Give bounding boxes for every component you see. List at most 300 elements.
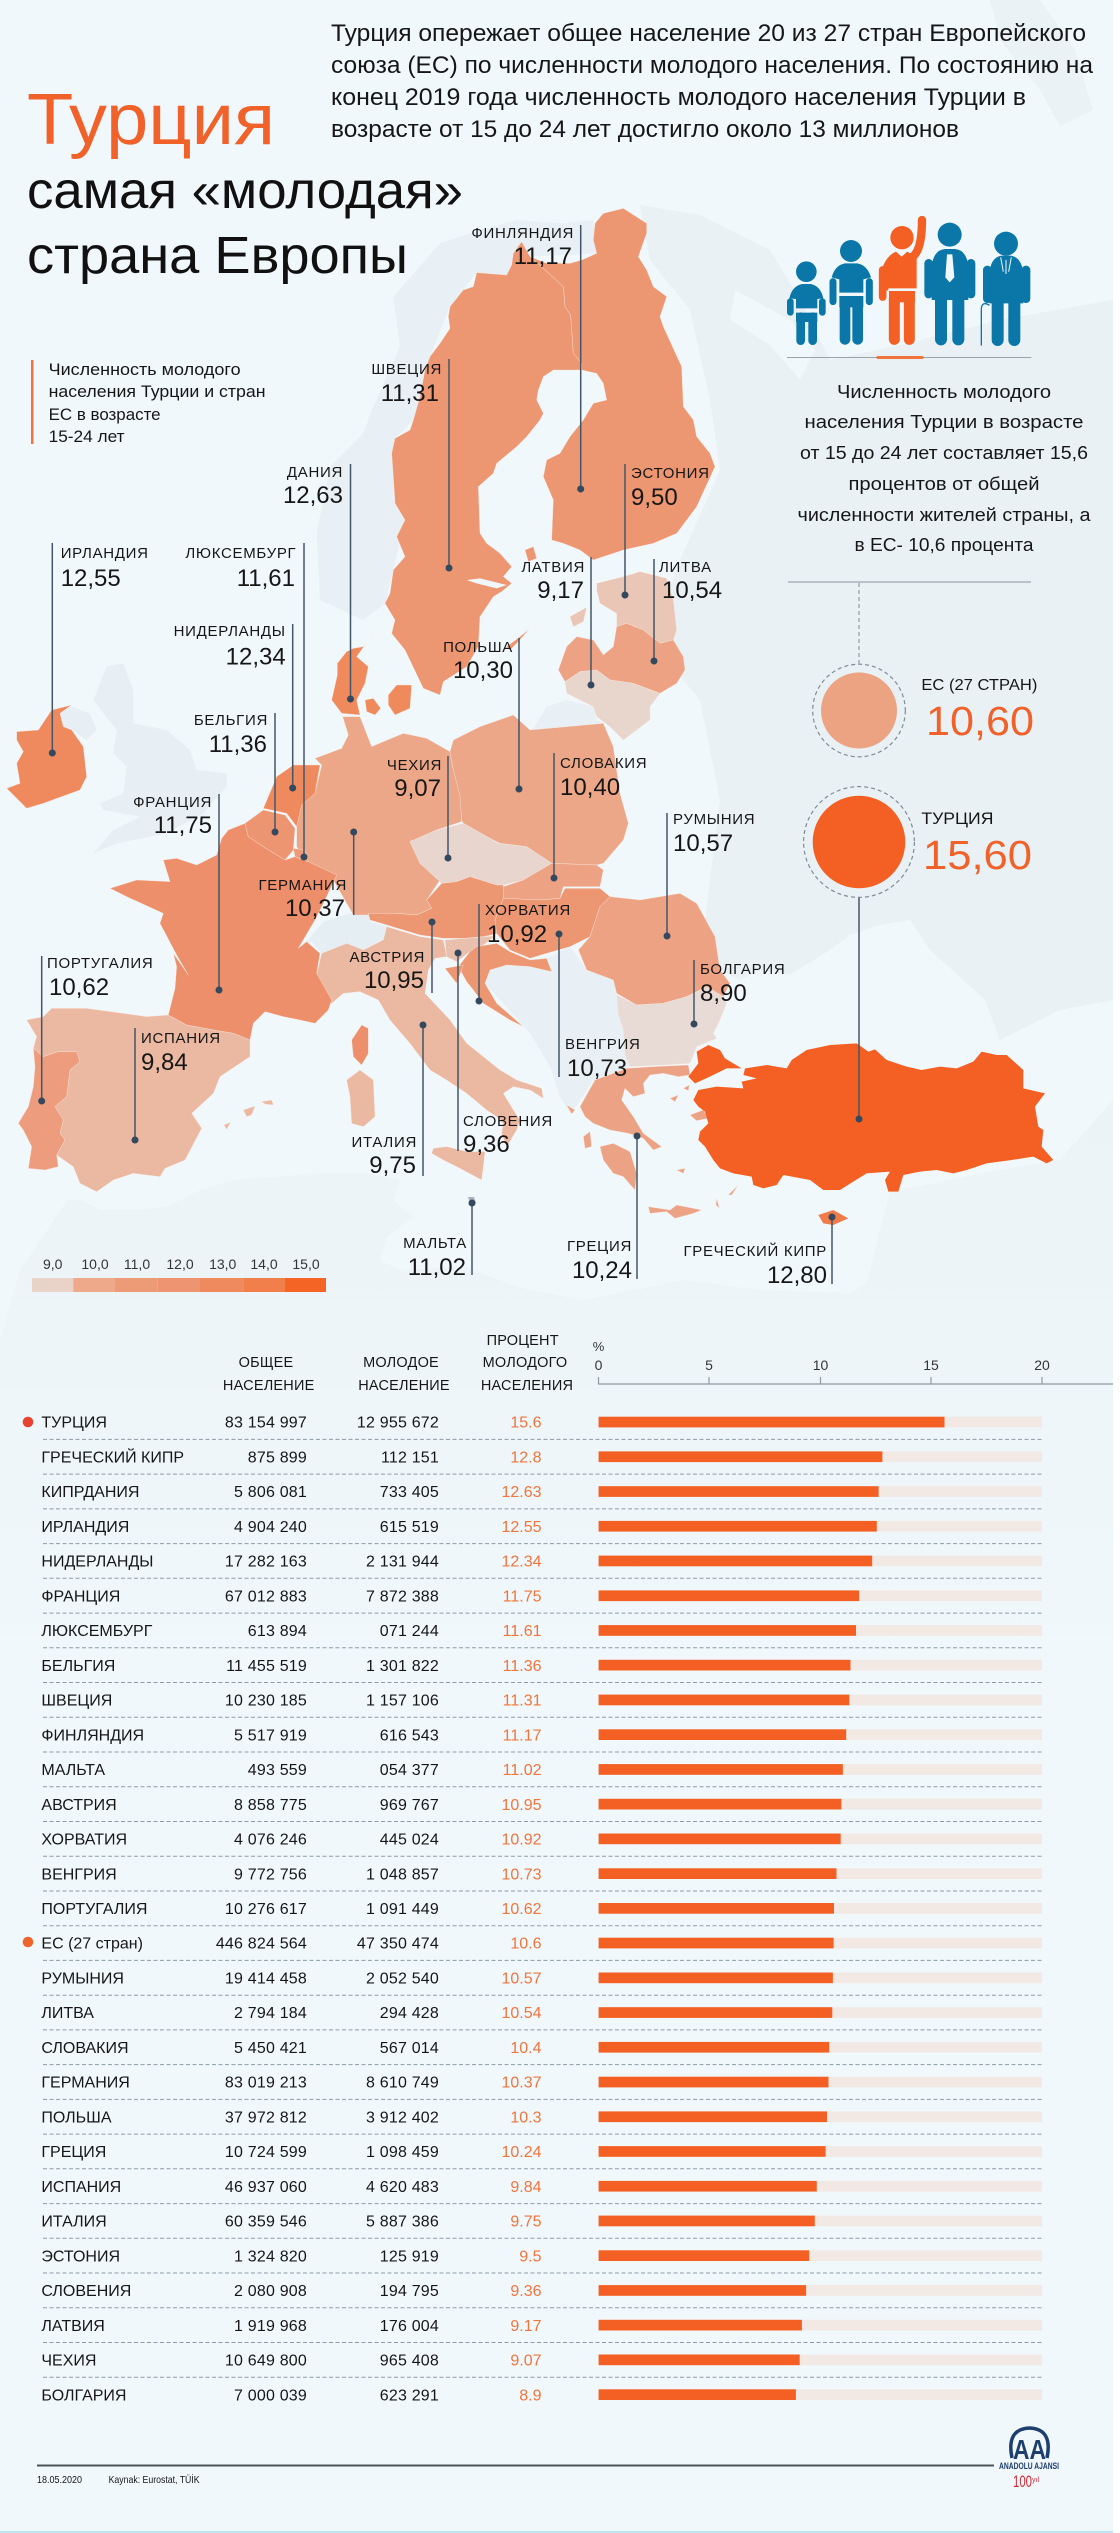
footer source xyxy=(37,2464,994,2486)
chart axis: 10 xyxy=(813,1357,828,1373)
row: Slovakia: 10.4 xyxy=(510,2040,542,2057)
callout: Slovakia: 10,40 xyxy=(560,774,620,801)
country: Malta xyxy=(468,1197,476,1203)
row: Croatia: 4 076 246 xyxy=(234,1832,307,1849)
callout: Romania: 10,57 xyxy=(673,830,733,857)
country: Croatia xyxy=(445,943,552,1027)
title: Турция xyxy=(27,80,275,160)
callout: Malta: 11,02 xyxy=(408,1254,466,1281)
row: Netherlands: 12.34 xyxy=(501,1554,542,1571)
row: Sweden: 11.31 xyxy=(503,1693,542,1710)
callout: France: ФРАНЦИЯ xyxy=(133,794,212,811)
table header: ПРОЦЕНТ xyxy=(487,1333,559,1349)
row: Bulgaria: 8.9 xyxy=(519,2387,542,2404)
row: Latvia: 176 004 xyxy=(380,2318,439,2335)
background land shapes xyxy=(0,0,1113,1700)
callout: Croatia xyxy=(476,902,571,1004)
row: Spain: 46 937 060 xyxy=(225,2179,307,2196)
callout: Latvia: ЛАТВИЯ xyxy=(521,559,585,576)
callout: Latvia xyxy=(521,557,594,688)
row: Luxembourg: 071 244 xyxy=(380,1623,439,1640)
circle: EU 27: 10,60 xyxy=(926,698,1034,744)
colour scale legend xyxy=(32,1256,326,1292)
country: Latvia xyxy=(558,623,685,693)
row: Slovakia: 567 014 xyxy=(380,2040,439,2057)
row: Greece: 1 098 459 xyxy=(366,2144,439,2161)
row: Lithuania: ЛИТВА xyxy=(41,2005,94,2022)
row: Finland xyxy=(41,1727,1042,1752)
country: France xyxy=(110,823,368,1065)
youth share description: населения Турции в возрасте xyxy=(804,412,1084,432)
callout: Bulgaria xyxy=(690,960,785,1028)
icon: age groups of people xyxy=(787,220,1031,359)
colour scale legend: 12,0 xyxy=(166,1256,194,1272)
youth share description xyxy=(798,382,1092,555)
callout: Hungary xyxy=(556,930,640,1082)
row: Ireland xyxy=(41,1519,1042,1544)
lake and Swedish islands xyxy=(467,547,537,650)
row: Poland: 3 912 402 xyxy=(366,2109,439,2126)
row: Italy: 5 887 386 xyxy=(366,2214,439,2231)
callout: Finland: ФИНЛЯНДИЯ xyxy=(471,225,574,242)
row: Romania: РУМЫНИЯ xyxy=(41,1971,124,1988)
row: Spain: ИСПАНИЯ xyxy=(41,2179,121,2196)
callout: Ireland: 12,55 xyxy=(61,565,121,592)
logo: Anadolu Ajansi: yıl xyxy=(1032,2477,1039,2484)
youth share description: численности жителей страны, а xyxy=(798,505,1092,525)
row: Germany: 83 019 213 xyxy=(225,2075,307,2092)
row: Sweden: 10 230 185 xyxy=(225,1693,307,1710)
row: Latvia: 1 919 968 xyxy=(234,2318,307,2335)
map subtitle: населения Турции и стран xyxy=(49,382,266,401)
country: Slovakia xyxy=(503,863,603,900)
row: Greek Cyprus: 12.8 xyxy=(510,1449,542,1466)
row: Estonia: 9.5 xyxy=(519,2248,542,2265)
row: Slovakia xyxy=(41,2040,1042,2065)
country: Slovenia xyxy=(445,936,495,962)
row: Poland: 10.3 xyxy=(510,2109,542,2126)
table header: МОЛОДОГО xyxy=(483,1355,567,1371)
row: EU 27: 446 824 564 xyxy=(216,1936,307,1953)
row: Austria: 8 858 775 xyxy=(234,1797,307,1814)
callout: Portugal: 10,62 xyxy=(49,974,109,1001)
row: Greece: 10 724 599 xyxy=(225,2144,307,2161)
callout: Poland: ПОЛЬША xyxy=(443,639,513,656)
row: Sweden: 1 157 106 xyxy=(366,1693,439,1710)
callout: Malta xyxy=(403,1200,476,1281)
row: Poland: 37 972 812 xyxy=(225,2109,307,2126)
country: Portugal xyxy=(18,1048,80,1170)
row: Malta xyxy=(41,1762,1042,1787)
country: Czechia xyxy=(410,823,552,885)
row: Slovenia: 9.36 xyxy=(510,2283,542,2300)
row: Turkey xyxy=(23,1415,1042,1439)
callout: Czechia xyxy=(387,756,452,862)
country: Estonia xyxy=(570,572,677,643)
row: Turkey: 15.6 xyxy=(510,1415,542,1432)
callout: Slovenia: СЛОВЕНИЯ xyxy=(463,1113,553,1130)
intro paragraph: возрасте от 15 до 24 лет достигло около 13 миллионов xyxy=(331,116,959,143)
callout: Greek Cyprus: ГРЕЧЕСКИЙ КИПР xyxy=(683,1242,827,1260)
row: Croatia: ХОРВАТИЯ xyxy=(41,1832,127,1849)
row: Latvia: ЛАТВИЯ xyxy=(41,2318,105,2335)
row: Germany: 8 610 749 xyxy=(366,2075,439,2092)
callout: Poland xyxy=(443,638,522,792)
row: Greek Cyprus: 875 899 xyxy=(248,1449,307,1466)
logo: Anadolu Ajansi: 100 xyxy=(1013,2472,1032,2491)
row: Finland: 5 517 919 xyxy=(234,1727,307,1744)
callout: Poland: 10,30 xyxy=(453,657,513,684)
callout: Austria xyxy=(349,918,436,994)
callout: Belgium xyxy=(194,712,278,836)
intro paragraph: Турция опережает общее население 20 из 27 стран Европейского xyxy=(331,20,1086,47)
map subtitle: Численность молодого xyxy=(49,360,241,379)
row: Sweden: ШВЕЦИЯ xyxy=(41,1693,112,1710)
callout: Czechia: ЧЕХИЯ xyxy=(387,757,442,774)
row: Greece: 10.24 xyxy=(501,2144,542,2161)
circle: Turkey xyxy=(804,787,1032,1122)
country: Germany xyxy=(297,717,462,915)
row: EU 27: ЕС (27 стран) xyxy=(41,1936,143,1953)
row: Slovakia: 5 450 421 xyxy=(234,2040,307,2057)
chart axis xyxy=(593,1339,1113,1384)
callout: Austria: АВСТРИЯ xyxy=(349,949,425,966)
table header: ОБЩЕЕ xyxy=(239,1355,293,1371)
callout: Luxembourg xyxy=(185,543,308,860)
row: Romania: 10.57 xyxy=(501,1971,542,1988)
callout: Greek Cyprus: 12,80 xyxy=(767,1262,827,1289)
row: Portugal xyxy=(41,1901,1042,1926)
chart axis: % xyxy=(593,1339,605,1354)
row: Hungary xyxy=(41,1866,1042,1891)
row: Germany: ГЕРМАНИЯ xyxy=(41,2075,130,2092)
row: Croatia: 445 024 xyxy=(380,1832,439,1849)
callout: Estonia: ЭСТОНИЯ xyxy=(631,465,710,482)
row: Finland: 11.17 xyxy=(503,1727,542,1744)
row: Malta: 054 377 xyxy=(380,1762,439,1779)
callout: Germany: 10,37 xyxy=(285,895,345,922)
comparison circles xyxy=(788,581,1037,1122)
callout: Sweden: 11,31 xyxy=(381,380,439,407)
row: Slovakia: СЛОВАКИЯ xyxy=(41,2040,129,2057)
callout: Denmark xyxy=(283,464,354,702)
row: Ireland: ИРЛАНДИЯ xyxy=(41,1519,129,1536)
table header: МОЛОДОЕ xyxy=(363,1355,439,1371)
table header: НАСЕЛЕНИЯ xyxy=(481,1378,573,1394)
callout: Sweden: ШВЕЦИЯ xyxy=(371,361,442,378)
callout: Sweden xyxy=(371,359,452,572)
colour scale legend: 15,0 xyxy=(292,1256,320,1272)
callout: Portugal xyxy=(38,955,153,1104)
row: Luxembourg: 613 894 xyxy=(248,1623,307,1640)
row: Slovenia: СЛОВЕНИЯ xyxy=(41,2283,131,2300)
callout: Lithuania: ЛИТВА xyxy=(659,559,712,576)
row: Portugal: 10.62 xyxy=(501,1901,542,1918)
row: Finland: ФИНЛЯНДИЯ xyxy=(41,1727,144,1744)
country: Romania xyxy=(578,893,730,1005)
row: Bulgaria: БОЛГАРИЯ xyxy=(41,2387,126,2404)
row: Belgium: 11 455 519 xyxy=(226,1658,307,1675)
circle: EU 27: ЕС (27 СТРАН) xyxy=(921,677,1037,694)
country: Bulgaria xyxy=(617,987,727,1067)
row: Lithuania: 10.54 xyxy=(501,2005,542,2022)
title xyxy=(27,80,463,285)
callout: Hungary: ВЕНГРИЯ xyxy=(565,1036,640,1053)
callout: Estonia xyxy=(622,464,710,598)
callout: Belgium: 11,36 xyxy=(209,731,267,758)
row: Italy: 9.75 xyxy=(510,2214,542,2231)
callout: Luxembourg: ЛЮКСЕМБУРГ xyxy=(185,545,296,562)
row: Latvia xyxy=(41,2318,1042,2342)
row: France xyxy=(41,1588,1042,1613)
row: Bulgaria xyxy=(41,2387,1042,2404)
callout: Greece: ГРЕЦИЯ xyxy=(567,1238,632,1255)
callout: Slovakia xyxy=(550,753,647,882)
chart axis: 5 xyxy=(705,1357,713,1373)
callout: France: 11,75 xyxy=(154,812,212,839)
row: Belgium: 11.36 xyxy=(503,1658,542,1675)
chart axis: 20 xyxy=(1034,1357,1050,1373)
row: Austria xyxy=(41,1797,1042,1822)
row: Denmark: 5 806 081 xyxy=(234,1484,307,1501)
row: Luxembourg xyxy=(41,1623,1042,1648)
row: Lithuania xyxy=(41,2005,1042,2030)
row: Luxembourg: 11.61 xyxy=(503,1623,542,1640)
country: Ireland xyxy=(7,705,87,808)
row: Czechia: 10 649 800 xyxy=(225,2353,307,2370)
callout: Hungary: 10,73 xyxy=(567,1055,627,1082)
country: Spain xyxy=(27,1008,273,1192)
row: Turkey: 83 154 997 xyxy=(225,1415,307,1432)
callout: Austria: 10,95 xyxy=(364,967,424,994)
callout: Greece: 10,24 xyxy=(572,1257,632,1284)
row: Italy: 60 359 546 xyxy=(225,2214,307,2231)
row: Netherlands: 2 131 944 xyxy=(366,1554,439,1571)
callout: Denmark: ДАНИЯ xyxy=(287,464,343,481)
circle: Turkey: ТУРЦИЯ xyxy=(921,809,993,828)
callout: Belgium: БЕЛЬГИЯ xyxy=(194,712,268,729)
title: самая «молодая» xyxy=(27,162,463,220)
callout: Bulgaria: 8,90 xyxy=(700,980,747,1007)
row: Ireland: 4 904 240 xyxy=(234,1519,307,1536)
callout: Greek Cyprus xyxy=(683,1214,836,1289)
callout: Ireland xyxy=(49,543,149,756)
row: Czechia: ЧЕХИЯ xyxy=(41,2353,96,2370)
row: Greece: ГРЕЦИЯ xyxy=(41,2144,106,2161)
callout: Greece xyxy=(567,1132,640,1284)
footer source: 18.05.2020 xyxy=(37,2475,82,2486)
row: Croatia xyxy=(41,1832,1042,1856)
country: Italy xyxy=(317,927,543,1180)
row: Italy: ИТАЛИЯ xyxy=(41,2214,107,2231)
callout: Denmark: 12,63 xyxy=(283,482,343,509)
callout: Slovenia xyxy=(454,950,553,1158)
row: Portugal: ПОРТУГАЛИЯ xyxy=(41,1901,147,1918)
row: Netherlands xyxy=(41,1554,1042,1578)
row: EU 27 xyxy=(23,1936,1042,1960)
callout: Latvia: 9,17 xyxy=(537,577,584,604)
callout: Malta: МАЛЬТА xyxy=(403,1235,467,1252)
row: Spain: 9.84 xyxy=(510,2179,542,2196)
callout: Portugal: ПОРТУГАЛИЯ xyxy=(47,955,153,972)
callout: Germany: ГЕРМАНИЯ xyxy=(258,877,347,894)
map of Europe xyxy=(7,208,1053,1225)
country: Turkey xyxy=(688,1043,1053,1192)
country: Lithuania xyxy=(565,670,660,740)
chart axis: 0 xyxy=(595,1357,603,1373)
row: Turkey: 12 955 672 xyxy=(357,1415,439,1432)
row: Austria: 969 767 xyxy=(380,1797,439,1814)
row: Slovenia: 2 080 908 xyxy=(234,2283,307,2300)
callout: Croatia: 10,92 xyxy=(487,921,547,948)
row: Sweden xyxy=(41,1693,1042,1717)
row: Estonia: 1 324 820 xyxy=(234,2248,307,2265)
callout: France xyxy=(133,794,222,994)
row: Greek Cyprus: ГРЕЧЕСКИЙ КИПР xyxy=(41,1447,184,1466)
row: Denmark: 733 405 xyxy=(380,1484,439,1501)
row: Bulgaria: 7 000 039 xyxy=(234,2387,307,2404)
callout: Finland: 11,17 xyxy=(514,243,572,270)
row: Ireland: 12.55 xyxy=(501,1519,542,1536)
logo: Anadolu Ajansi: ANADOLU AJANSI xyxy=(999,2461,1059,2471)
country: Greece xyxy=(567,1065,738,1218)
callout: Slovakia: СЛОВАКИЯ xyxy=(560,755,647,772)
row: Greek Cyprus xyxy=(41,1447,1042,1474)
row: Austria: 10.95 xyxy=(501,1797,542,1814)
callout: Italy: ИТАЛИЯ xyxy=(352,1134,417,1151)
callout: Estonia: 9,50 xyxy=(631,484,678,511)
country: Luxembourg xyxy=(293,848,308,862)
callout: Spain xyxy=(132,1028,221,1144)
row: Estonia: ЭСТОНИЯ xyxy=(41,2248,120,2265)
colour scale legend: 11,0 xyxy=(124,1256,150,1272)
row: Turkey: ТУРЦИЯ xyxy=(41,1415,107,1432)
circle: Turkey: 15,60 xyxy=(923,832,1032,878)
callout: Slovenia: 9,36 xyxy=(463,1131,510,1158)
youth share description: от 15 до 24 лет составляет 15,6 xyxy=(800,443,1088,463)
table header: НАСЕЛЕНИЕ xyxy=(223,1378,315,1394)
row: Malta: 11.02 xyxy=(503,1762,542,1779)
row: Finland: 616 543 xyxy=(380,1727,439,1744)
row: Hungary: 9 772 756 xyxy=(234,1866,307,1883)
row: Croatia: 10.92 xyxy=(501,1832,542,1849)
row: Estonia: 125 919 xyxy=(380,2248,439,2265)
logo: Anadolu Ajansi xyxy=(999,2428,1059,2491)
row: Romania: 2 052 540 xyxy=(366,1971,439,1988)
row: Portugal: 10 276 617 xyxy=(225,1901,307,1918)
callout: Germany xyxy=(258,828,357,922)
country: Poland xyxy=(450,715,628,865)
row: Latvia: 9.17 xyxy=(510,2318,542,2335)
colour scale legend: 10,0 xyxy=(81,1256,109,1272)
table rows with bars xyxy=(23,1415,1042,2404)
callout: Czechia: 9,07 xyxy=(394,775,441,802)
row: Hungary: ВЕНГРИЯ xyxy=(41,1866,117,1883)
callout: Italy xyxy=(352,1022,426,1179)
row: Germany: 10.37 xyxy=(501,2075,542,2092)
row: Belgium: БЕЛЬГИЯ xyxy=(41,1658,115,1675)
map subtitle: ЕС в возрасте xyxy=(49,405,161,424)
title: страна Европы xyxy=(27,227,408,285)
youth share description: Численность молодого xyxy=(837,382,1051,402)
callout: Italy: 9,75 xyxy=(369,1152,416,1179)
row: Romania xyxy=(41,1970,1042,1995)
row: Spain xyxy=(41,2179,1042,2204)
intro paragraph xyxy=(331,20,1094,143)
row: France: 67 012 883 xyxy=(225,1588,307,1605)
row: Italy xyxy=(41,2214,1042,2238)
country: Cyprus xyxy=(818,1210,848,1225)
row: Romania: 19 414 458 xyxy=(225,1971,307,1988)
row: Luxembourg: ЛЮКСЕМБУРГ xyxy=(41,1623,153,1640)
map subtitle xyxy=(31,360,266,446)
row: Austria: АВСТРИЯ xyxy=(41,1797,117,1814)
colour scale legend: 9,0 xyxy=(43,1256,63,1272)
row: Hungary: 1 048 857 xyxy=(366,1866,439,1883)
row: Lithuania: 294 428 xyxy=(380,2005,439,2022)
row: Netherlands: НИДЕРЛАНДЫ xyxy=(41,1554,153,1571)
row: Spain: 4 620 483 xyxy=(366,2179,439,2196)
callout: Romania: РУМЫНИЯ xyxy=(673,811,755,828)
callout: Netherlands: 12,34 xyxy=(226,644,286,670)
country: Finland xyxy=(530,208,715,560)
country: Hungary xyxy=(495,888,610,958)
row: Greece xyxy=(41,2144,1042,2169)
row: Poland xyxy=(41,2109,1042,2134)
country: Netherlands xyxy=(263,765,320,827)
country: Sweden xyxy=(385,242,582,695)
row: Hungary: 10.73 xyxy=(501,1866,542,1883)
callout: Finland xyxy=(471,225,584,492)
row: Ireland: 615 519 xyxy=(380,1519,439,1536)
row: Belgium xyxy=(41,1658,1042,1682)
callout: Netherlands: НИДЕРЛАНДЫ xyxy=(174,623,286,640)
callout: Romania xyxy=(664,811,755,940)
callout: Spain: 9,84 xyxy=(141,1049,188,1076)
row: France: ФРАНЦИЯ xyxy=(41,1588,120,1605)
row: Belgium: 1 301 822 xyxy=(366,1658,439,1675)
map subtitle: 15-24 лет xyxy=(49,427,125,446)
row: Malta: МАЛЬТА xyxy=(41,1762,105,1779)
row: Denmark: 12.63 xyxy=(501,1484,542,1501)
callout: Lithuania xyxy=(650,559,722,664)
row: Germany xyxy=(41,2075,1042,2099)
callout: Ireland: ИРЛАНДИЯ xyxy=(61,545,149,562)
row: Greek Cyprus: 112 151 xyxy=(381,1449,439,1466)
logo: Anadolu Ajansi: AA xyxy=(1013,2434,1046,2465)
country: Denmark xyxy=(332,637,412,715)
row: Denmark xyxy=(41,1484,1042,1509)
map callouts xyxy=(38,225,835,1289)
row: EU 27: 10.6 xyxy=(510,1936,542,1953)
callout: Netherlands xyxy=(174,623,296,792)
row: Malta: 493 559 xyxy=(248,1762,307,1779)
callout: Lithuania: 10,54 xyxy=(662,577,722,604)
row: Denmark: КИПРДАНИЯ xyxy=(41,1484,139,1501)
table header xyxy=(223,1333,573,1394)
row: Portugal: 1 091 449 xyxy=(366,1901,439,1918)
colour scale legend: 13,0 xyxy=(209,1256,237,1272)
country: Belgium xyxy=(245,810,295,860)
circle: EU 27 xyxy=(813,664,1037,757)
row: Czechia xyxy=(41,2352,1042,2377)
row: Poland: ПОЛЬША xyxy=(41,2109,112,2126)
youth share description: процентов от общей xyxy=(848,474,1040,494)
row: France: 7 872 388 xyxy=(366,1588,439,1605)
intro paragraph: конец 2019 года численность молодого населения Турции в xyxy=(331,84,1026,111)
intro paragraph: союза (ЕС) по численности молодого населения. По состоянию на xyxy=(331,52,1094,79)
footer source: Kaynak: Eurostat, TÜİK xyxy=(109,2473,200,2486)
